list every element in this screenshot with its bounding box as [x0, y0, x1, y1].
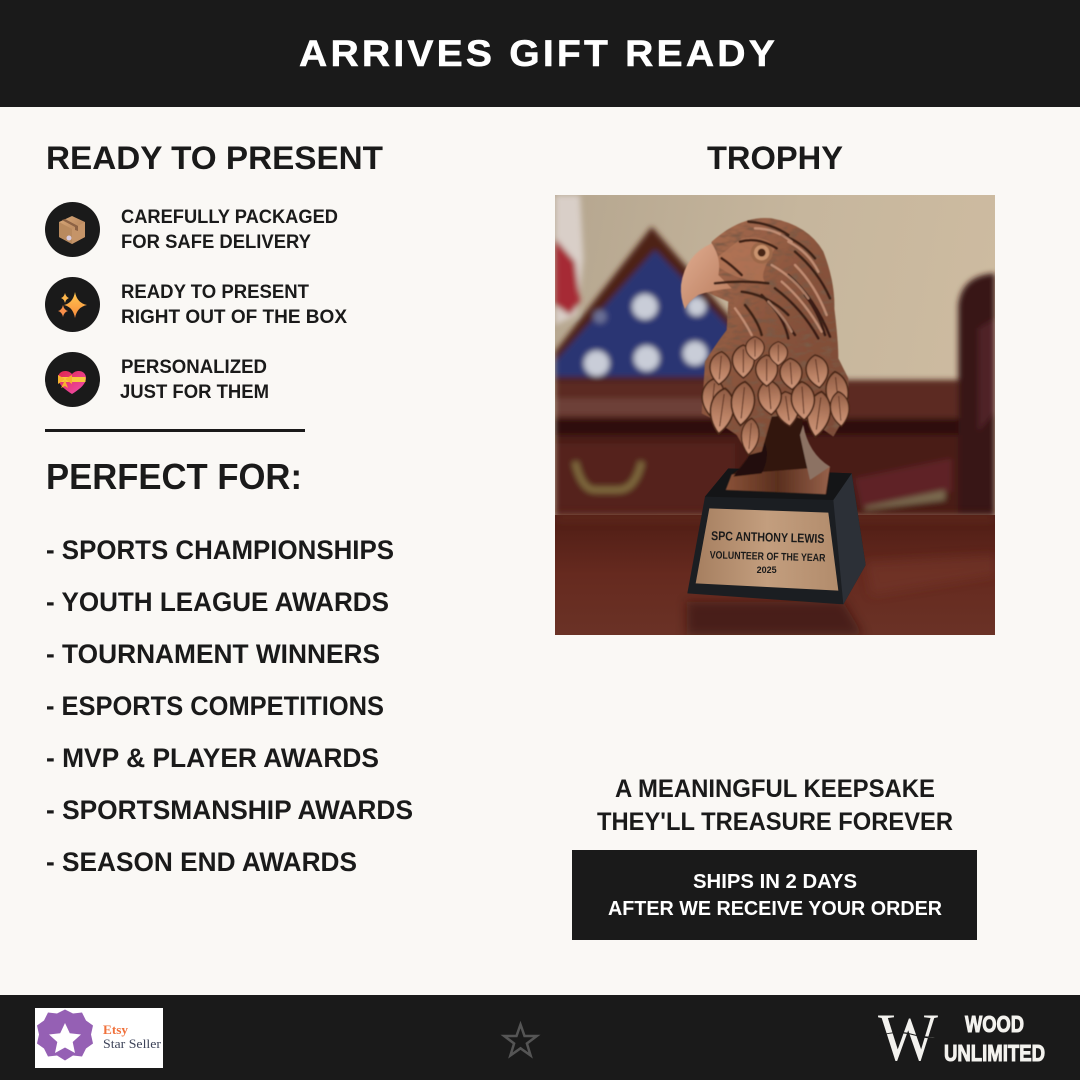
engraved plate: SPC ANTHONY LEWIS [711, 529, 825, 546]
trophy base [687, 468, 866, 604]
feature: ready out of box: RIGHT OUT OF THE BOX [121, 307, 347, 328]
panel: ready to present [45, 140, 383, 407]
engraved plate: VOLUNTEER OF THE YEAR [710, 549, 826, 564]
feature: packaged: FOR SAFE DELIVERY [121, 232, 311, 253]
title: ARRIVES GIFT READY [299, 33, 778, 74]
feature: personalized [45, 352, 269, 407]
photo: eagle trophy [555, 195, 995, 635]
chest feathers [700, 337, 851, 456]
list of occasions: - TOURNAMENT WINNERS [46, 639, 380, 669]
list of occasions: - MVP & PLAYER AWARDS [46, 743, 379, 773]
etsy star seller badge [35, 1008, 163, 1068]
wood unlimited logo: UNLIMITED [944, 1040, 1045, 1066]
panel: perfect for [46, 456, 413, 877]
feature: ready out of box [45, 277, 347, 332]
neck streaks [715, 222, 830, 338]
header band [0, 0, 1080, 107]
feature: personalized: JUST FOR THEM [120, 382, 269, 403]
list of occasions: - YOUTH LEAGUE AWARDS [46, 587, 389, 617]
heading: ready to present: READY TO PRESENT [46, 140, 383, 176]
list of occasions [46, 535, 413, 877]
etsy star seller badge: Etsy [103, 1022, 129, 1037]
feature: packaged: CAREFULLY PACKAGED [121, 207, 338, 228]
feature: personalized: PERSONALIZED [121, 357, 267, 378]
wood unlimited logo: W [878, 999, 939, 1075]
list of occasions: - SEASON END AWARDS [46, 847, 357, 877]
shipping callout [572, 850, 977, 940]
list of occasions: - SPORTS CHAMPIONSHIPS [46, 535, 394, 565]
feature: ready out of box: READY TO PRESENT [121, 282, 309, 303]
tagline: A MEANINGFUL KEEPSAKE [615, 775, 935, 803]
footer band [0, 995, 1080, 1080]
shipping callout: AFTER WE RECEIVE YOUR ORDER [608, 898, 943, 920]
etsy star seller badge: Star Seller [103, 1037, 162, 1051]
heading: trophy: TROPHY [707, 140, 843, 176]
tagline: THEY'LL TREASURE FOREVER [597, 808, 953, 836]
list of occasions: - ESPORTS COMPETITIONS [46, 691, 384, 721]
engraved plate: 2025 [757, 565, 777, 575]
feature: packaged [45, 202, 338, 257]
heading: perfect for: PERFECT FOR: [46, 456, 302, 497]
list of occasions: - SPORTSMANSHIP AWARDS [46, 795, 413, 825]
tagline [597, 775, 953, 836]
icon: star [504, 1024, 537, 1056]
wood unlimited logo [878, 999, 1045, 1075]
engraved plate [696, 508, 838, 591]
wood unlimited logo: WOOD [965, 1011, 1024, 1037]
shipping callout: SHIPS IN 2 DAYS [693, 871, 857, 893]
eagle bust [681, 218, 851, 494]
